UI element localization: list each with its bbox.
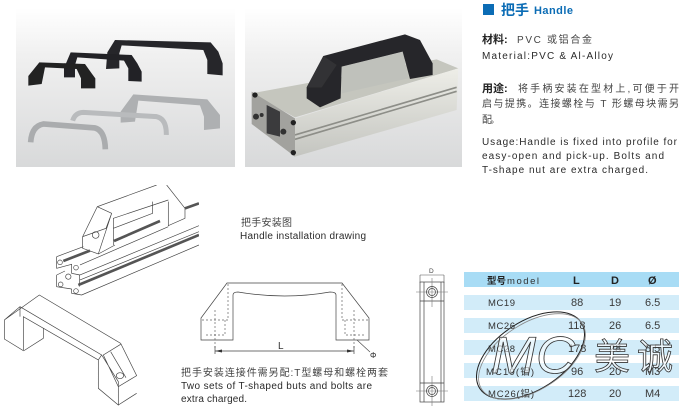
diameter leader (357, 340, 376, 360)
text block: usage Chinese (482, 81, 679, 126)
text block: connector note: Two sets of T-shaped buts and bolts are (181, 381, 372, 392)
row MC19 (铝): 20 (609, 366, 621, 378)
text block: usage Chinese: 用途: (482, 81, 508, 95)
icon: small silver handle (31, 124, 105, 149)
row MC19 (铝): 96 (571, 366, 583, 378)
row MC19: MC19 (488, 298, 515, 309)
row MC19: 88 (571, 297, 583, 309)
row MC28: 8.5 (645, 343, 660, 355)
text block: usage English (482, 137, 678, 176)
row MC26 (铝): 20 (609, 388, 621, 400)
photo panel: black and silver handles (16, 8, 235, 167)
row MC19 (铝) (464, 363, 679, 378)
caption: installation drawing: 把手安装图 (241, 216, 292, 229)
watermark: MC 美诚 logo: 美 (594, 336, 630, 377)
caption: installation drawing (240, 216, 366, 242)
icon: medium black handle (64, 52, 142, 82)
diameter leader: Φ (370, 351, 376, 360)
dimension line L (215, 341, 354, 354)
row MC26: MC26 (488, 321, 515, 332)
row MC28: 28 (609, 343, 621, 355)
text block: material: 材料: (482, 32, 508, 46)
table header: D (611, 275, 619, 287)
row MC19: 19 (609, 297, 621, 309)
row MC19 (铝): M3 (645, 366, 660, 378)
row MC26: 118 (568, 320, 586, 332)
profile top face (252, 59, 458, 117)
text block: connector note: 把手安装连接件需另配:T型螺母和螺栓两套 (181, 366, 388, 379)
row MC26 (铝) (464, 386, 679, 401)
profile end face (252, 92, 295, 157)
icon: large silver handle (121, 94, 220, 130)
text block: material: Material:PVC & Al-Alloy (482, 51, 613, 62)
icon: small black handle (28, 62, 95, 88)
table header (464, 272, 679, 287)
text block: usage English: T-shape nut are extra charged. (482, 165, 648, 176)
icon: medium silver handle (73, 112, 166, 135)
text block: usage English: easy-open and pick-up. Bolts and (482, 151, 664, 162)
row MC28: 178 (568, 343, 586, 355)
row MC26: 26 (609, 320, 621, 332)
table header: Ø (648, 275, 657, 287)
drawing: side view with dimension D: D (429, 268, 434, 275)
photo panel: handle mounted on aluminium profile (245, 8, 462, 167)
watermark: MC 美诚 logo: 诚 (637, 336, 673, 377)
table: model dimensions (464, 272, 679, 401)
text block: usage Chinese: 将手柄安装在型材上,可便于开 (518, 82, 679, 95)
black handle (307, 34, 433, 107)
row MC26 (铝): MC26(铝) (488, 388, 534, 400)
row MC28: MC28 (488, 344, 515, 355)
watermark: MC 美诚 logo (461, 294, 673, 407)
text block: usage Chinese: 配。 (482, 114, 500, 126)
text block: connector note (181, 366, 388, 405)
row MC19 (464, 295, 679, 310)
row MC26 (铝): M4 (645, 388, 660, 400)
row MC26: 6.5 (645, 320, 660, 332)
profile seen through handle (342, 52, 408, 93)
icon: large black handle (106, 40, 223, 75)
row MC26 (464, 318, 679, 333)
text block: material: PVC 或铝合金 (517, 33, 592, 46)
caption: installation drawing: Handle installation drawing (240, 231, 366, 242)
drawing: handle installed on profile (57, 185, 199, 295)
heading: 把手 Handle: Handle (534, 5, 573, 17)
dimension line L: L (278, 341, 284, 352)
row MC26 (铝): 128 (568, 388, 586, 400)
heading: 把手 Handle: 把手 (501, 2, 529, 18)
row MC28 (464, 340, 679, 355)
text block: usage Chinese: 启与提携。连接螺栓与 T 形螺母块需另 (482, 97, 679, 110)
table header: model (507, 276, 539, 287)
drawing: isometric handle (4, 295, 137, 405)
heading: 把手 Handle (483, 2, 573, 18)
table header: 型号 (487, 275, 506, 287)
text block: usage English: Usage:Handle is fixed into profile for (482, 137, 678, 148)
drawing: front view with dimension L (201, 283, 376, 360)
watermark: MC 美诚 logo: MC (491, 327, 575, 385)
table header: L (573, 275, 580, 287)
text block: connector note: extra charged. (181, 394, 247, 405)
drawing: side view with dimension D (416, 268, 448, 406)
profile side face (295, 68, 458, 157)
text block: material (482, 32, 613, 62)
row MC19 (铝): MC19(铝) (486, 366, 534, 378)
row MC19: 6.5 (645, 297, 660, 309)
